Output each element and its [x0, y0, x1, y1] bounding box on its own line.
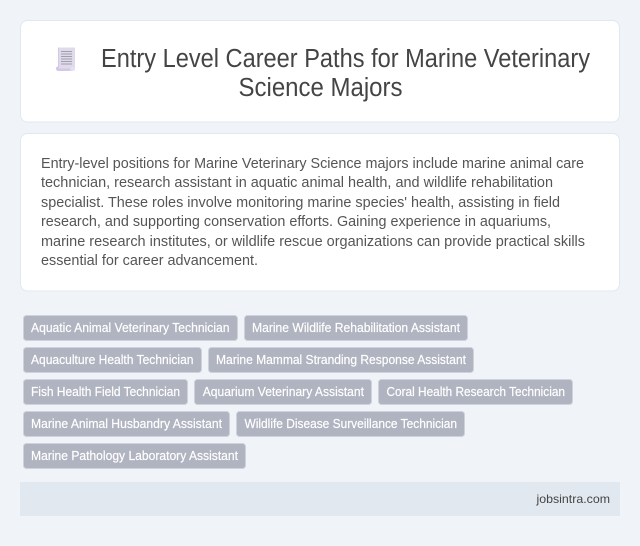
text block: description: Entry-level positions for Marine Veterinary Science majors include marine animal care: [41, 155, 584, 172]
tag: Coral Health Research Technician: Coral Health Research Technician: [386, 385, 565, 399]
title: Entry Level Career Paths for Marine Veterinary: [101, 45, 590, 73]
text block: description: marine research institutes, or wildlife rescue organizations can provide practical skills: [41, 233, 585, 250]
tag: Wildlife Disease Surveillance Technician: Wildlife Disease Surveillance Technician: [244, 417, 457, 431]
tag: Marine Animal Husbandry Assistant: Marine Animal Husbandry Assistant: [31, 417, 223, 431]
tag list: [24, 316, 572, 468]
tag: Aquarium Veterinary Assistant: Aquarium Veterinary Assistant: [203, 385, 365, 399]
tag: Fish Health Field Technician: Fish Health Field Technician: [31, 385, 180, 399]
text block: description: research, and supporting conservation efforts. Gaining experience in aquariums,: [41, 213, 551, 230]
tag: Aquatic Animal Veterinary Technician: [24, 316, 238, 340]
panel: header card: [20, 20, 620, 122]
tag: Marine Pathology Laboratory Assistant: [24, 444, 246, 468]
footer bar: [20, 482, 620, 516]
tag: Marine Mammal Stranding Response Assistant: [208, 348, 474, 372]
icon: scroll document: [56, 48, 75, 71]
tag: Aquaculture Health Technician: [24, 348, 202, 372]
text block: description: essential for career advancement.: [41, 252, 258, 269]
footer source text: jobsintra.com: [535, 492, 610, 506]
title: [101, 45, 590, 102]
tag: Wildlife Disease Surveillance Technician: [236, 412, 464, 436]
panel: description card: [20, 134, 620, 291]
tag: Aquaculture Health Technician: Aquaculture Health Technician: [31, 353, 194, 367]
text block: description: [41, 155, 585, 269]
tag: Marine Wildlife Rehabilitation Assistant: [244, 316, 468, 340]
tag: Aquatic Animal Veterinary Technician: Aquatic Animal Veterinary Technician: [31, 321, 230, 335]
tag: Aquarium Veterinary Assistant: [194, 380, 372, 404]
text block: description: specialist. These roles involve monitoring marine species' health, assisting in field: [41, 194, 560, 211]
tag: Marine Pathology Laboratory Assistant: Marine Pathology Laboratory Assistant: [31, 449, 239, 463]
tag: Marine Wildlife Rehabilitation Assistant: Marine Wildlife Rehabilitation Assistant: [252, 321, 461, 335]
tag: Marine Mammal Stranding Response Assistant: Marine Mammal Stranding Response Assistant: [216, 353, 467, 367]
tag: Coral Health Research Technician: [378, 380, 572, 404]
text block: description: technician, research assistant in aquatic animal health, and wildlife rehabilitation: [41, 174, 553, 191]
tag: Fish Health Field Technician: [24, 380, 188, 404]
tag: Marine Animal Husbandry Assistant: [24, 412, 230, 436]
title: Science Majors: [238, 74, 402, 102]
